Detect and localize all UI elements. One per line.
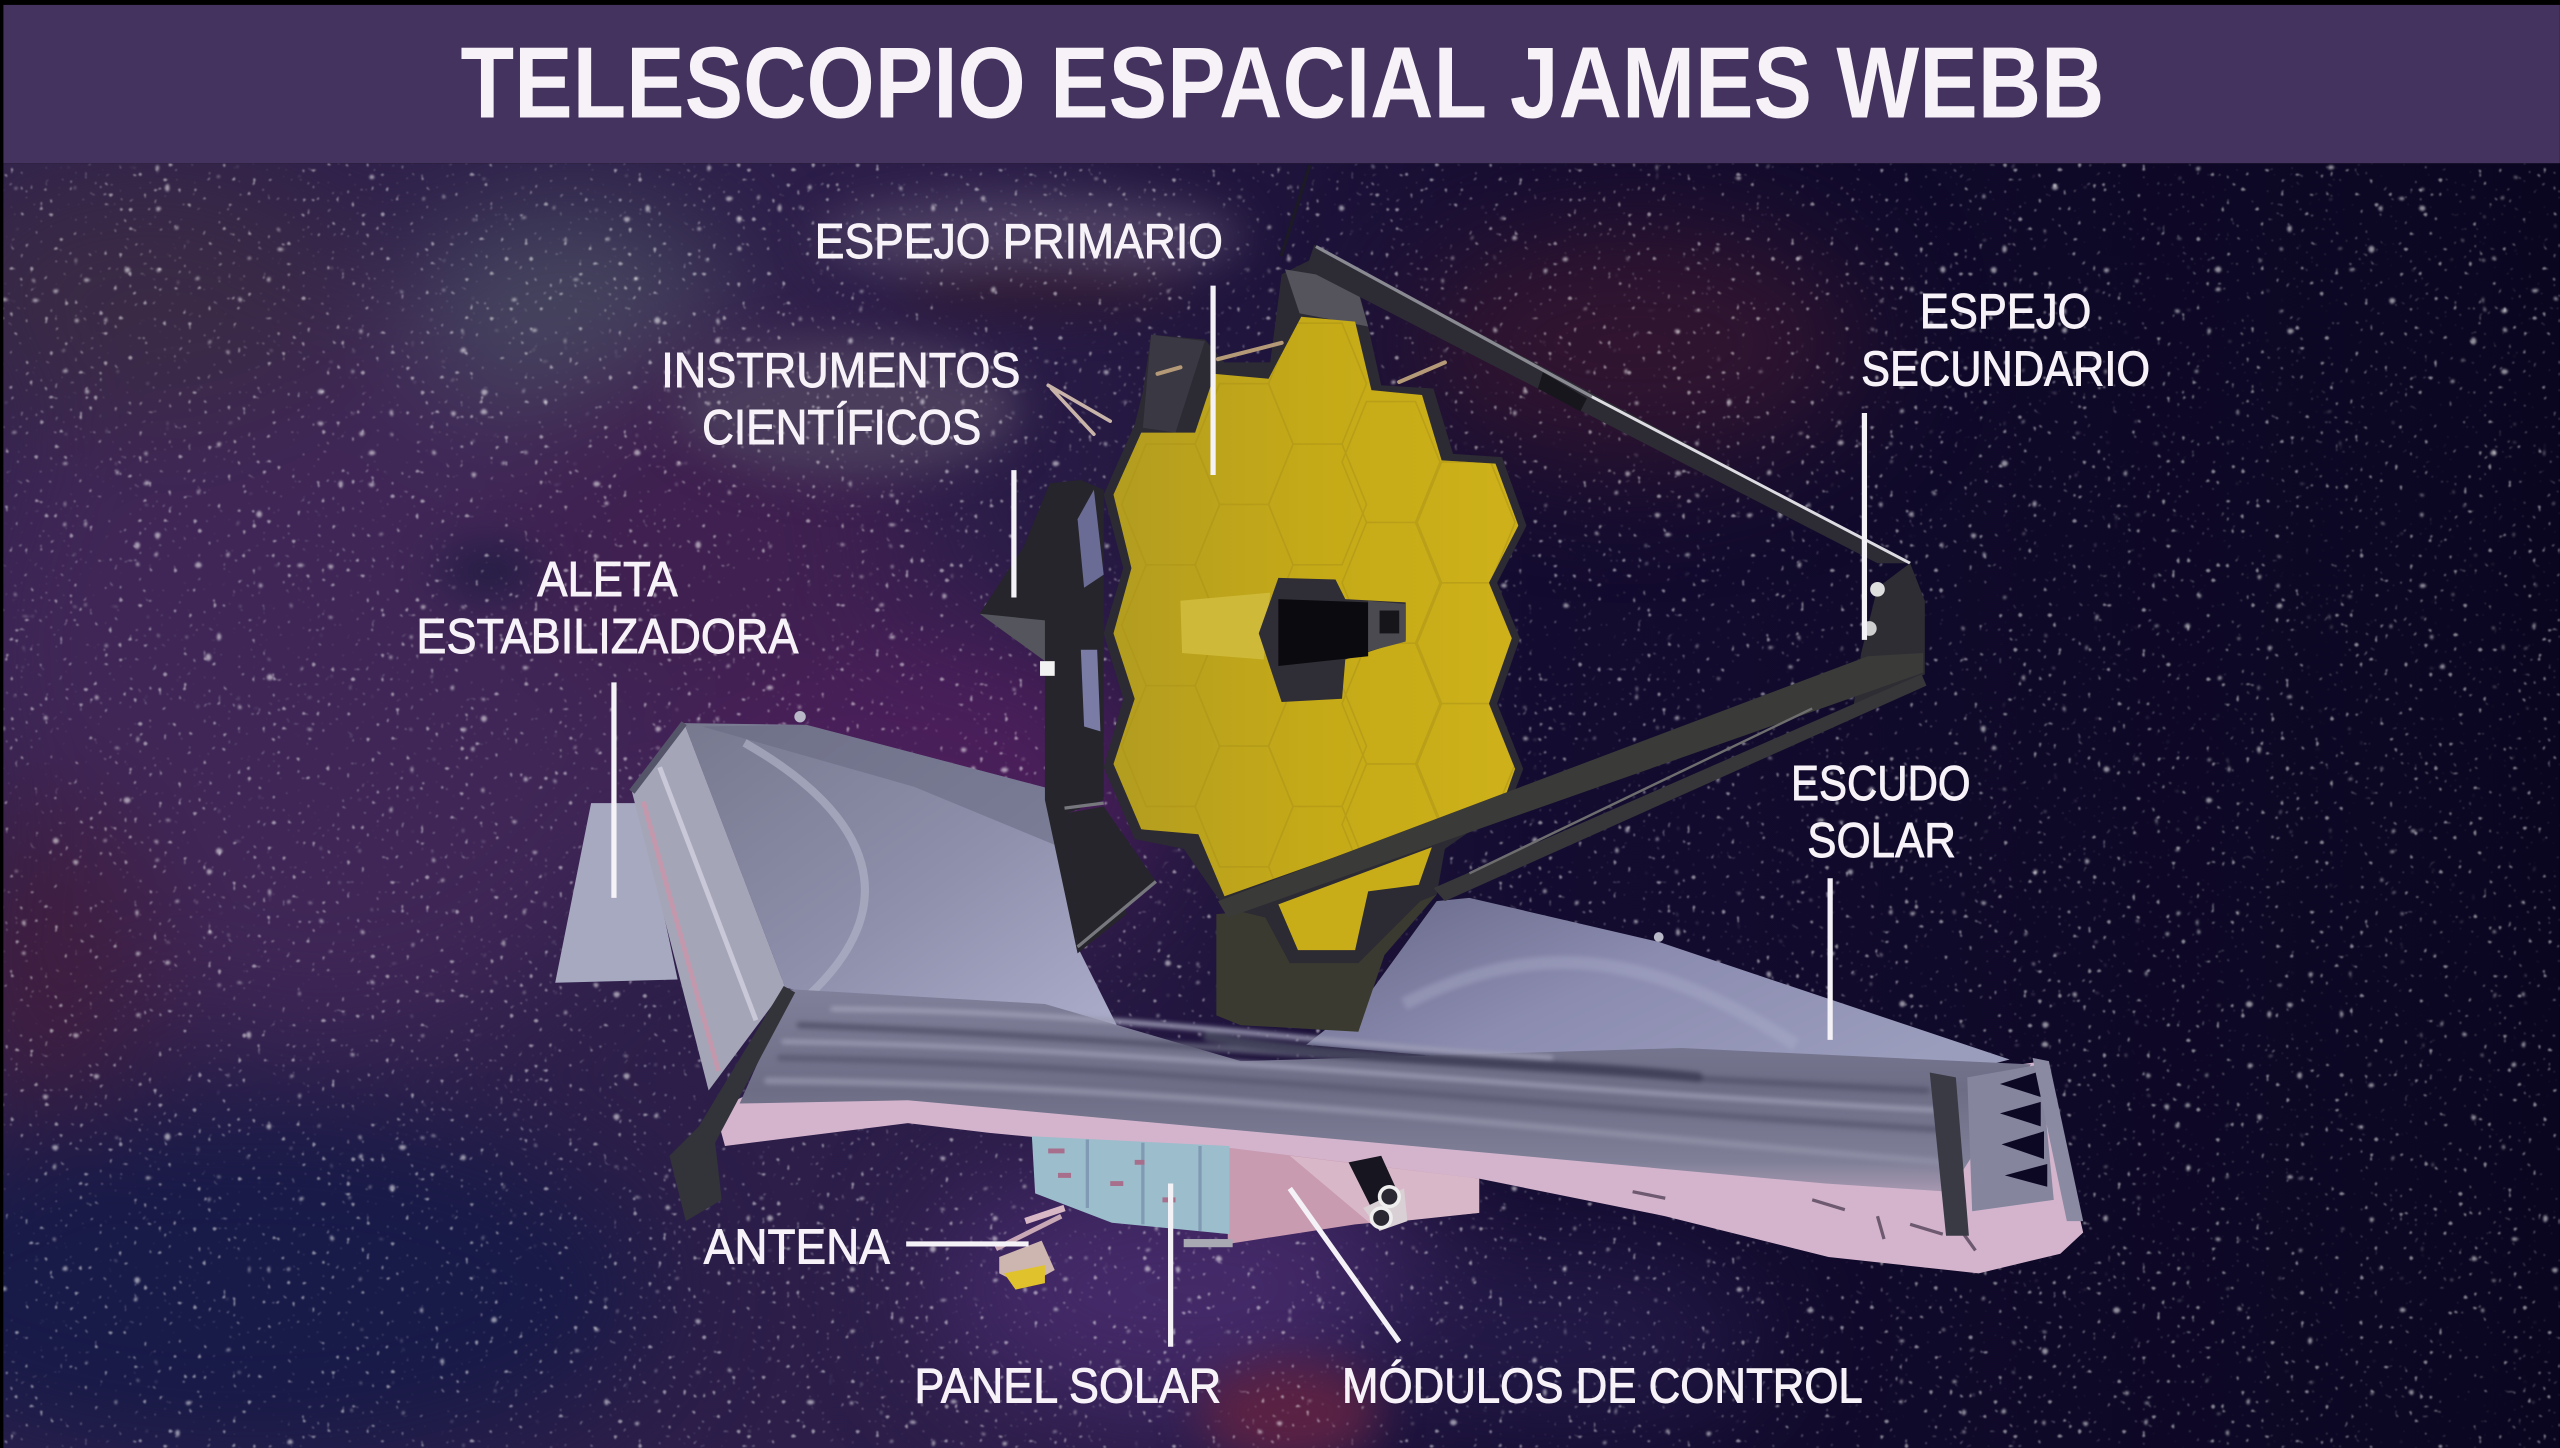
sunshield right wing bbox=[1306, 898, 2010, 1094]
lower struts bbox=[1218, 653, 1926, 917]
sunshield pink lower layer bbox=[715, 1061, 2083, 1273]
antenna dish bbox=[996, 1208, 1065, 1290]
rear structure bbox=[980, 258, 1527, 963]
label: aleta estabilizadora bbox=[416, 553, 799, 898]
label: escudo solar bbox=[1791, 757, 1971, 1040]
label: escudo solar: SOLAR bbox=[1807, 814, 1956, 868]
lower mirror segment bbox=[1278, 847, 1432, 950]
secondary mirror mount bbox=[1853, 563, 1925, 710]
spacecraft bus bbox=[1228, 1148, 1479, 1244]
stabilizing fin bbox=[555, 803, 678, 983]
label: aleta estabilizadora: ESTABILIZADORA bbox=[416, 610, 799, 664]
label: módulos de control: MÓDULOS DE CONTROL bbox=[1342, 1359, 1863, 1413]
label: módulos de control bbox=[1290, 1188, 1863, 1413]
title: TELESCOPIO ESPACIAL JAMES WEBB bbox=[461, 27, 2104, 140]
sunshield main band bbox=[740, 989, 2031, 1192]
label: instrumentos científicos: CIENTÍFICOS bbox=[702, 401, 981, 455]
upper strut bbox=[1306, 245, 1910, 563]
label: espejo secundario bbox=[1861, 285, 2150, 640]
sunshield left wing bbox=[632, 711, 1127, 1090]
left boom bbox=[669, 986, 795, 1221]
solar panel bbox=[1032, 1136, 1233, 1247]
label: panel solar: PANEL SOLAR bbox=[914, 1359, 1221, 1413]
sunshield zigzag end bbox=[1930, 1058, 2083, 1236]
label: aleta estabilizadora: ALETA bbox=[537, 553, 678, 607]
label: escudo solar: ESCUDO bbox=[1791, 757, 1971, 811]
header band bbox=[3, 5, 2560, 163]
label: espejo secundario: SECUNDARIO bbox=[1861, 342, 2150, 396]
label: instrumentos científicos bbox=[661, 344, 1020, 597]
small thrusters and antenna mast bbox=[1048, 167, 1445, 434]
central support tower bbox=[1216, 895, 1437, 1032]
label: espejo primario: ESPEJO PRIMARIO bbox=[815, 215, 1223, 269]
control modules bbox=[1349, 1156, 1407, 1231]
label: antena: ANTENA bbox=[704, 1221, 890, 1275]
central baffle bbox=[1180, 578, 1406, 702]
label: instrumentos científicos: INSTRUMENTOS bbox=[661, 344, 1020, 398]
label: espejo secundario: ESPEJO bbox=[1920, 285, 2091, 339]
primary mirror bbox=[1113, 317, 1518, 927]
telescope illustration bbox=[555, 167, 2083, 1290]
